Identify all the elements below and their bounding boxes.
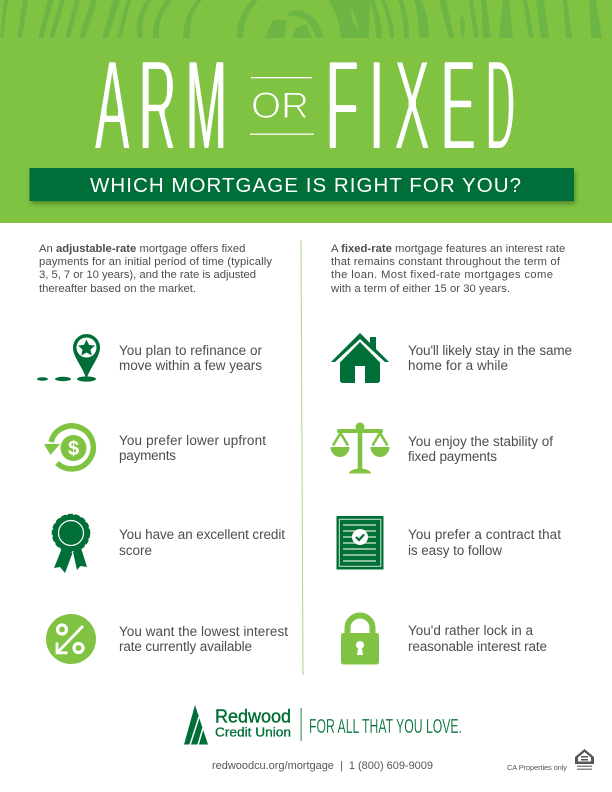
text: refinance: move within a few years — [119, 358, 262, 373]
intro: fixed-rate: the loan. Most fixed-rate mortgages come — [331, 269, 553, 281]
text: lowest rate: You want the lowest interest — [119, 624, 288, 639]
text: lock rate: reasonable interest rate — [408, 639, 547, 654]
header panel — [0, 0, 612, 223]
center divider — [301, 240, 303, 675]
intro: adjustable-rate: payments for an initial period of time (typically — [39, 256, 272, 268]
intro: fixed-rate: that remains constant throughout the term of — [331, 256, 561, 268]
title: ARM or Fixed: A — [95, 33, 130, 177]
contact line: redwoodcu.org/mortgage | 1 (800) 609-9009 — [212, 760, 433, 772]
text: upfront: payments — [119, 448, 176, 463]
text: same home: You'll likely stay in the same — [408, 343, 572, 358]
icon: award ribbon — [52, 514, 90, 573]
text: upfront: You prefer lower upfront — [119, 433, 266, 448]
icon: house — [331, 333, 389, 383]
title: ARM or Fixed: E — [441, 33, 475, 177]
subtitle banner: WHICH MORTGAGE IS RIGHT FOR YOU? — [90, 174, 521, 197]
intro: fixed-rate: with a term of either 15 or 30 years. — [330, 283, 510, 295]
text: stability: fixed payments — [408, 449, 497, 464]
logo: Redwood Credit Union: Redwood — [215, 706, 291, 726]
icon: dollar cycle: $ — [68, 438, 79, 460]
intro: adjustable-rate: 3, 5, 7 or 10 years), and the rate is adjusted — [39, 269, 256, 281]
text: credit: score — [119, 543, 152, 558]
icon: scales — [330, 422, 390, 474]
intro: adjustable-rate: An adjustable-rate mortgage offers fixed — [39, 243, 245, 255]
tagline: FOR ALL THAT YOU LOVE. — [309, 715, 462, 738]
note: CA properties: CA Properties only — [507, 763, 567, 772]
text: stability: You enjoy the stability of — [408, 434, 553, 449]
text: lowest rate: rate currently available — [119, 639, 252, 654]
icon: dollar cycle — [44, 426, 93, 469]
text: lock rate: You'd rather lock in a — [408, 623, 533, 638]
word: or: OR — [251, 85, 309, 126]
title: ARM or Fixed: R — [139, 33, 176, 177]
text: contract: You prefer a contract that — [408, 527, 561, 542]
title: ARM or Fixed — [95, 32, 515, 178]
intro: fixed-rate: A fixed-rate mortgage features an interest rate — [331, 243, 565, 255]
icon: equal housing — [575, 749, 594, 770]
logo: Redwood Credit Union: Credit Union — [215, 724, 291, 740]
logo: Redwood Credit Union — [184, 705, 291, 745]
title: ARM or Fixed: D — [486, 35, 515, 178]
title: ARM or Fixed: I — [370, 33, 384, 177]
text: refinance: You plan to refinance or — [119, 343, 262, 358]
icon: contract — [336, 516, 384, 570]
text: contract: is easy to follow — [408, 543, 502, 558]
logo: tree mark — [184, 705, 208, 745]
icon: percent circle — [46, 614, 96, 664]
logo divider — [300, 708, 302, 741]
icon: padlock — [341, 616, 379, 664]
title: ARM or Fixed: F — [326, 33, 358, 177]
wood grain pattern — [0, 0, 602, 38]
intro: adjustable-rate: thereafter based on the market. — [39, 283, 196, 295]
icon: map pin — [37, 334, 100, 382]
text: same home: home for a while — [408, 358, 508, 373]
text: credit: You have an excellent credit — [119, 527, 285, 542]
title: ARM or Fixed: M — [186, 33, 227, 177]
subtitle banner — [30, 168, 574, 201]
title: ARM or Fixed: X — [394, 32, 430, 177]
word: or — [250, 77, 314, 135]
